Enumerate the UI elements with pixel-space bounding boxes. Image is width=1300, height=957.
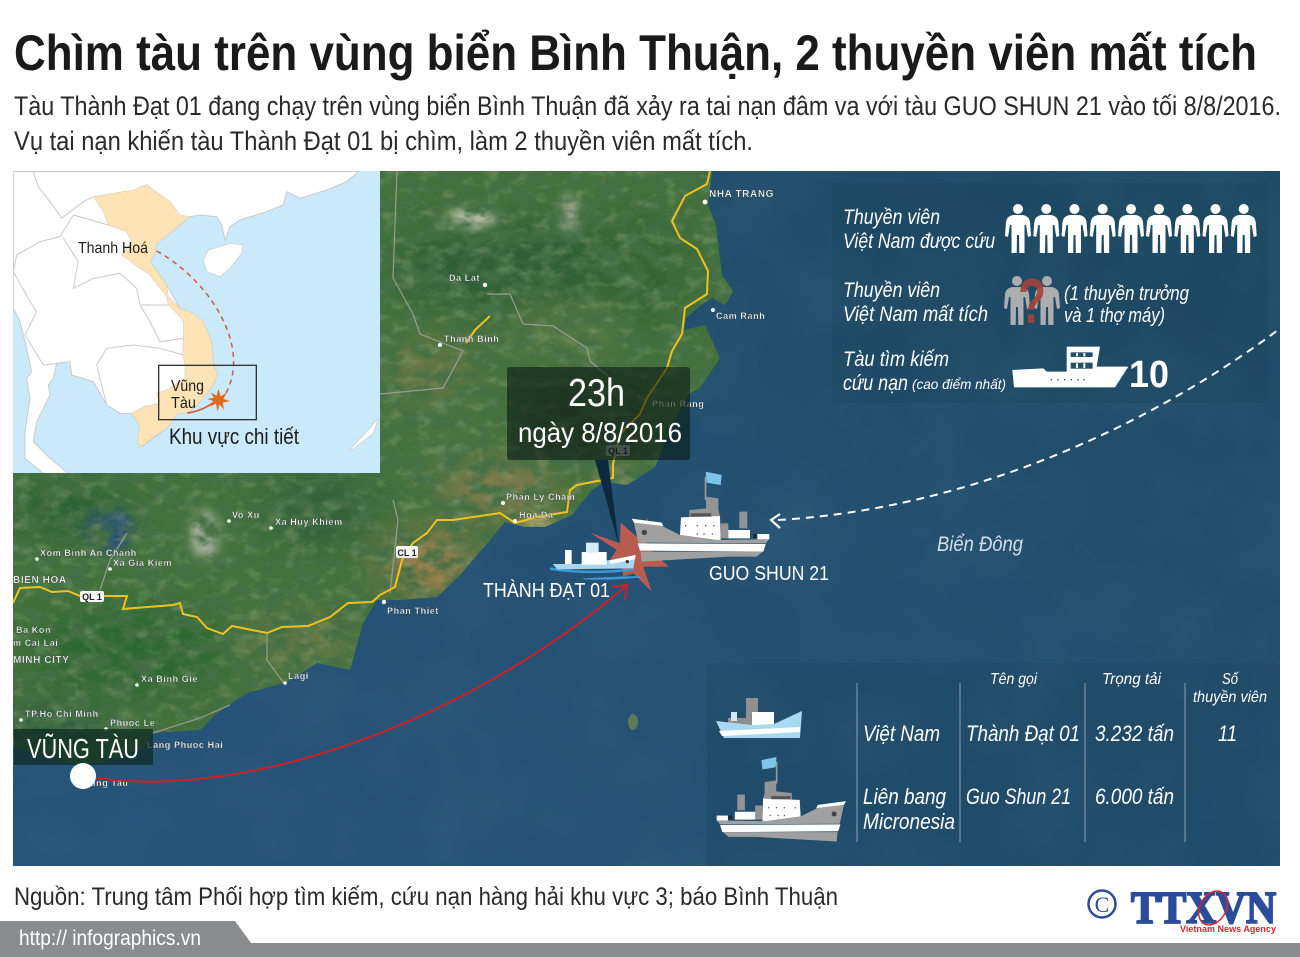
road: QL1	[13, 171, 710, 634]
map place labels: Xom Binh An Chanh	[40, 548, 137, 558]
map place labels: Cam Ranh	[716, 311, 765, 321]
map place labels: MINH CITY	[13, 655, 70, 666]
route: Guo Shun dashed	[771, 330, 1278, 528]
road shields: QL 1	[82, 592, 102, 602]
map place labels: TP.Ho Chi Minh	[25, 709, 99, 719]
road shields	[80, 445, 630, 602]
icon: collision star	[207, 389, 230, 412]
inset land	[13, 172, 358, 473]
logo: TTXVN: TTXVN	[1131, 883, 1276, 933]
stat labels: cứu nạn	[843, 372, 908, 395]
ship labels: GUO SHUN 21	[709, 563, 829, 585]
logo: TTXVN: Vietnam News Agency	[1180, 924, 1277, 935]
collision scene	[550, 472, 769, 592]
stat labels: Thuyền viên	[843, 206, 940, 229]
stat labels: và 1 thợ máy)	[1064, 305, 1165, 327]
inset Vietnam	[93, 184, 217, 447]
callout: time of accident	[507, 367, 690, 546]
source: Nguồn: Trung tâm Phối hợp tìm kiếm, cứu nạn hàng hải khu vực 3; báo Bình Thuận	[14, 883, 838, 911]
map place labels: Vo Xu	[232, 510, 260, 520]
road shields: CL 1	[397, 548, 417, 558]
footer bar: http:// infographics.vn	[19, 927, 201, 950]
map place labels: Xa Binh Gie	[141, 674, 198, 684]
intro text	[14, 91, 1281, 156]
secondary roads	[100, 171, 610, 733]
table headers: Số	[1222, 671, 1240, 688]
table headers: thuyền viên	[1193, 689, 1267, 706]
map place labels: Lang Phuoc Hai	[147, 740, 223, 750]
table rows: 11	[1218, 721, 1237, 746]
detail-area box	[159, 365, 256, 420]
marker: Vũng Tàu: VŨNG TÀU	[27, 733, 139, 764]
route: Thành Đạt red arc	[96, 585, 627, 782]
city dots	[19, 200, 715, 731]
map place labels: Phan Ly Cham	[506, 492, 575, 502]
label: Biển Đông: Biển Đông	[937, 533, 1023, 556]
table ship: Thành Đạt 01	[716, 698, 802, 738]
map place labels	[13, 189, 774, 788]
footer bar	[0, 921, 1300, 957]
table rows: Micronesia	[863, 809, 955, 834]
marker: Vũng Tàu	[14, 729, 153, 789]
island	[628, 714, 638, 730]
map place labels: BIEN HOA	[13, 575, 67, 586]
ship labels	[483, 563, 829, 602]
icon: 2 missing crew	[1004, 265, 1060, 337]
logo: TTXVN: C	[1095, 892, 1109, 917]
map place labels: Xa Gia Kiem	[113, 558, 172, 568]
inset route	[157, 251, 234, 395]
icon: 2 missing crew: ?	[1018, 265, 1046, 337]
panel: crew and rescue stats	[832, 183, 1268, 403]
table dividers	[857, 683, 1185, 842]
stat labels: Thuyền viên	[843, 279, 940, 302]
stat labels: (1 thuyền trưởng	[1064, 283, 1189, 305]
inset labels: Khu vực chi tiết	[169, 424, 299, 449]
stat labels: Tàu tìm kiếm	[843, 348, 949, 371]
inset labels: Vũng	[171, 378, 204, 395]
map place labels: Phuoc Le	[110, 718, 155, 728]
table rows	[863, 721, 1237, 834]
icon: search ship	[1012, 347, 1128, 387]
explosion	[590, 517, 669, 592]
map place labels: Ba Kon	[16, 625, 51, 635]
map place labels: m Cai Lai	[13, 638, 58, 648]
table headers: Trọng tải	[1102, 671, 1161, 688]
satellite map	[0, 171, 1280, 866]
callout: time of accident: ngày 8/8/2016	[518, 417, 682, 448]
icon: 9 rescued crew	[1005, 204, 1257, 253]
intro text: Vụ tai nạn khiến tàu Thành Đạt 01 bị chìm, làm 2 thuyền viên mất tích.	[14, 126, 753, 156]
callout: time of accident: 23h	[568, 372, 625, 415]
inset labels	[78, 240, 299, 449]
panel: ship comparison table	[707, 663, 1280, 866]
stat labels: Việt Nam mất tích	[843, 303, 988, 326]
table rows: Việt Nam	[863, 721, 940, 746]
map place labels: Thanh Binh	[444, 334, 500, 344]
stat labels	[843, 206, 1189, 395]
table headers: Tên gọi	[990, 671, 1037, 688]
stat labels: (cao điểm nhất)	[912, 376, 1006, 392]
map place labels: Phan Rang	[652, 399, 704, 409]
table rows: 3.232 tấn	[1095, 721, 1174, 746]
road shields: QL 1	[608, 446, 628, 456]
map place labels: Lagi	[288, 671, 309, 681]
ship: Thành Đạt 01	[550, 543, 641, 580]
panel: inset locator map	[13, 171, 380, 473]
table headers	[990, 671, 1267, 706]
ship labels: THÀNH ĐẠT 01	[483, 579, 610, 602]
stat labels: Việt Nam được cứu	[843, 230, 995, 253]
inset labels: Tàu	[171, 395, 196, 412]
table rows: Thành Đạt 01	[966, 721, 1080, 746]
map place labels: Da Lat	[449, 273, 480, 283]
map place labels: Xa Huy Khiem	[275, 517, 343, 527]
map place labels: Hoa Da	[519, 510, 554, 520]
map place labels: NHA TRANG	[709, 189, 774, 200]
number of search ships: 10	[1129, 354, 1169, 396]
table rows: Liên bang	[863, 784, 947, 809]
table ship: Guo Shun 21	[717, 757, 846, 842]
map place labels: Phan Thiet	[387, 606, 439, 616]
ship: Guo Shun 21	[632, 472, 769, 562]
table rows: Guo Shun 21	[966, 784, 1071, 809]
table rows: 6.000 tấn	[1095, 784, 1174, 809]
inset labels: Thanh Hoá	[78, 240, 148, 257]
map place labels: ung Tau	[90, 778, 129, 788]
